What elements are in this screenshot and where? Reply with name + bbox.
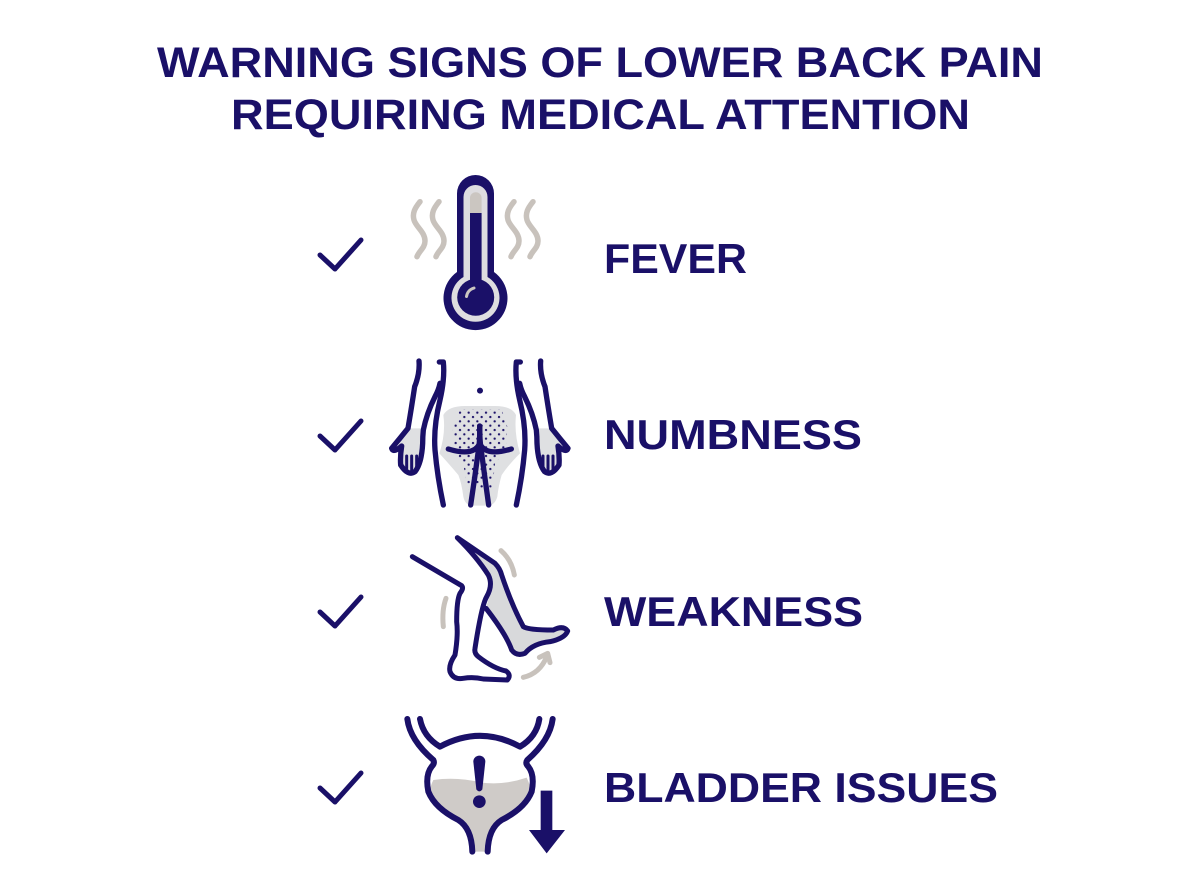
label: bladder issues: BLADDER ISSUES (604, 764, 998, 811)
icon: lower body with numb area (392, 361, 568, 506)
row: fever (320, 175, 747, 330)
title: WARNING SIGNS OF LOWER BACK PAIN (157, 39, 1043, 87)
icon: bladder with warning and down arrow (407, 719, 565, 853)
row: numbness (320, 361, 862, 506)
row: weakness (320, 538, 863, 680)
icon: check mark numbness (320, 421, 361, 450)
icon: thermometer with heat waves (413, 175, 538, 330)
icon: check mark fever (320, 240, 361, 269)
label: numbness: NUMBNESS (604, 411, 862, 458)
icon: check mark weakness (320, 597, 361, 626)
icon: legs with motion marks (412, 538, 568, 680)
icon: check mark bladder (320, 773, 361, 802)
row: bladder issues (320, 719, 998, 853)
label: weakness: WEAKNESS (604, 588, 863, 635)
label: fever: FEVER (604, 235, 747, 282)
title: REQUIRING MEDICAL ATTENTION (231, 91, 970, 139)
title (157, 39, 1043, 139)
